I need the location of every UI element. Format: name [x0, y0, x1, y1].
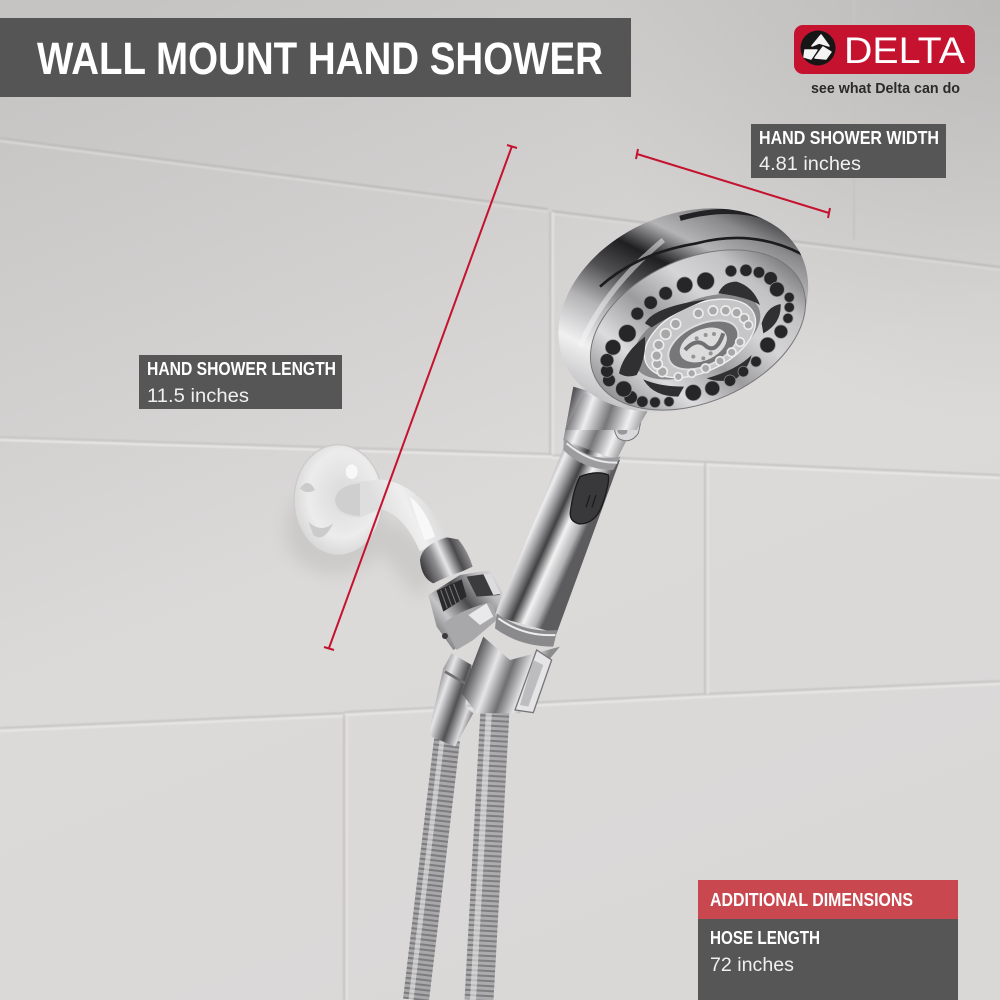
- hose: back: [411, 740, 447, 1000]
- neck: [565, 393, 648, 430]
- hand shower body: [495, 387, 643, 647]
- outer nozzles: [600, 264, 794, 408]
- outer shell: [526, 170, 841, 450]
- width measure line: [636, 149, 830, 218]
- wall mount swivel and holder: [420, 537, 560, 747]
- wall shadow: [285, 485, 440, 600]
- hose length: HOSE LENGTH: [710, 927, 820, 948]
- label: hand shower width: [751, 124, 946, 178]
- title banner: WALL MOUNT HAND SHOWER: [37, 33, 603, 84]
- label: hand shower width: 4.81 inches: [759, 154, 861, 175]
- center spray: [661, 310, 746, 379]
- holder body: [462, 637, 560, 713]
- swivel cap: [420, 537, 473, 583]
- swivel nut: [428, 570, 503, 650]
- label: hand shower length: HAND SHOWER LENGTH: [147, 359, 336, 379]
- hoses: [411, 710, 495, 1000]
- panel header: ADDITIONAL DIMENSIONS: [710, 889, 913, 910]
- spray slots: [619, 282, 781, 397]
- lower connector: [430, 653, 473, 747]
- label: hand shower width: HAND SHOWER WIDTH: [759, 128, 939, 148]
- panel header: [698, 880, 958, 919]
- hose length: 72 inches: [710, 955, 794, 976]
- Delta logo: DELTA: [844, 30, 965, 71]
- pause button: [570, 473, 609, 524]
- Delta logo: see what Delta can do: [811, 80, 960, 97]
- hose: front: [473, 710, 495, 1000]
- label: hand shower length: [139, 355, 342, 409]
- inner light nozzles: [652, 306, 753, 381]
- shower head: [558, 208, 808, 430]
- face plate: [565, 218, 831, 442]
- panel: additional dimensions: [698, 880, 958, 1000]
- collar: [495, 613, 557, 647]
- trigger: [614, 410, 643, 441]
- title banner: [0, 18, 631, 97]
- Delta logo: [794, 25, 975, 97]
- length measure line: [324, 145, 517, 650]
- wall arm and flange (faded): [294, 445, 447, 555]
- label: hand shower length: 11.5 inches: [147, 386, 249, 407]
- hose length: [710, 927, 820, 976]
